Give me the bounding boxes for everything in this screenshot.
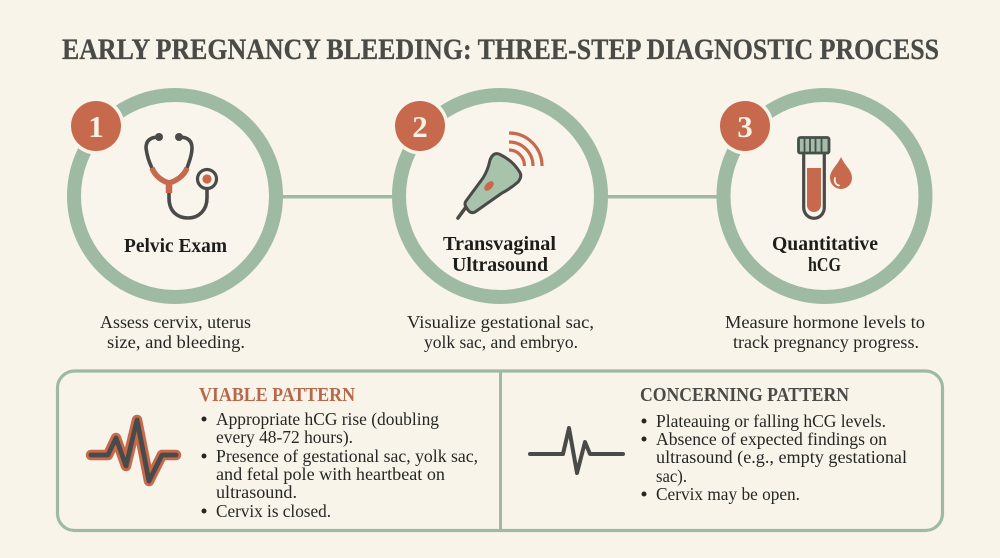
connector: step 1 to step 2 <box>282 195 393 198</box>
concerning bullet list: sac). <box>656 466 687 487</box>
concerning bullet list: Absence of expected findings on <box>656 429 887 449</box>
step 2 description: yolk sac, and embryo. <box>424 332 578 352</box>
viable bullet list: Appropriate hCG rise (doubling <box>216 409 439 430</box>
badge 1: 1 <box>88 109 104 144</box>
viable bullet list: ultrasound. <box>216 482 297 502</box>
step 3 heading: Quantitative <box>772 234 878 255</box>
badge 3: 3 <box>737 109 753 144</box>
step 3: quantitative hCG <box>716 95 926 352</box>
concerning bullet list: ultrasound (e.g., empty gestational <box>656 447 907 468</box>
badge 1 <box>68 98 124 154</box>
step 3 heading: hCG <box>808 255 841 276</box>
panel: concerning pattern <box>530 384 907 504</box>
panel: viable pattern <box>91 384 478 521</box>
viable bullet list: every 48-72 hours). <box>216 427 353 448</box>
viable heading: VIABLE PATTERN <box>199 384 355 406</box>
step 2 description: Visualize gestational sac, <box>407 312 594 332</box>
badge 2 <box>392 98 448 154</box>
panel frame <box>58 371 942 530</box>
step 1 description: Assess cervix, uterus <box>100 312 251 332</box>
ring 1 <box>74 95 276 297</box>
concerning bullet list: Plateauing or falling hCG levels. <box>656 411 886 431</box>
icon: test tube and blood drop <box>798 138 852 218</box>
panel: comparison of patterns <box>58 371 942 530</box>
step 3 description: track pregnancy progress. <box>733 332 919 352</box>
concerning heading: CONCERNING PATTERN <box>640 384 849 406</box>
concerning bullet list <box>642 411 907 504</box>
step 2 heading: Transvaginal <box>443 234 557 255</box>
viable bullet list: and fetal pole with heartbeat on <box>216 464 445 484</box>
step 1 description <box>100 312 251 352</box>
step 1: pelvic exam <box>68 95 276 352</box>
viable bullet list <box>202 409 478 521</box>
ring 2 <box>399 95 601 297</box>
viable bullet list: Presence of gestational sac, yolk sac, <box>216 446 478 466</box>
icon: strong heartbeat trace <box>91 420 176 481</box>
step 1 heading: Pelvic Exam <box>124 236 227 257</box>
step 3 description: Measure hormone levels to <box>725 312 925 332</box>
step 2 heading <box>443 234 557 276</box>
icon: ultrasound probe <box>458 133 542 218</box>
step 2 description <box>407 312 594 352</box>
step 2 heading: Ultrasound <box>452 255 548 276</box>
step 3 heading <box>772 234 878 276</box>
concerning bullet list: Cervix may be open. <box>656 484 800 504</box>
step 1 description: size, and bleeding. <box>107 332 245 352</box>
badge 2: 2 <box>412 109 428 144</box>
connector: step 2 to step 3 <box>607 195 718 198</box>
icon: stethoscope <box>146 133 216 218</box>
step 2: transvaginal ultrasound <box>392 95 601 352</box>
viable bullet list: Cervix is closed. <box>216 501 331 521</box>
ring 3 <box>724 95 926 297</box>
panel divider <box>499 371 502 530</box>
badge 3 <box>716 98 774 154</box>
icon: weak heartbeat trace <box>530 428 623 473</box>
step 3 description <box>725 312 925 352</box>
